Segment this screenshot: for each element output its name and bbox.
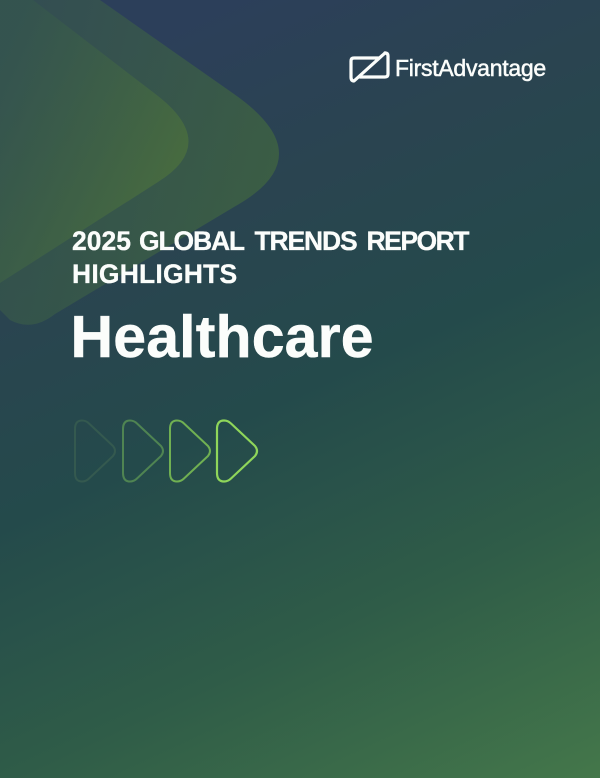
heading: report title: REPORT [366,226,468,256]
arrow 1 [75,420,115,482]
heading: report title: TRENDS [254,226,357,256]
heading: report title: 2025 [72,226,131,256]
heading: report title [72,226,470,288]
arrow 2 [123,420,163,482]
logo mark [349,51,390,83]
inner chevron shape [0,0,188,290]
logo: First Advantage [349,51,546,83]
logo wordmark: FirstAdvantage [395,55,546,81]
heading: report title: HIGHLIGHTS [72,258,237,288]
heading: Healthcare: Healthcare [70,304,374,370]
arrow 3 [170,420,210,482]
outer chevron shape [0,0,279,325]
arrows: four outlined triangles [74,419,258,483]
heading: report title: GLOBAL [139,226,244,256]
arrow 4 [217,420,257,482]
